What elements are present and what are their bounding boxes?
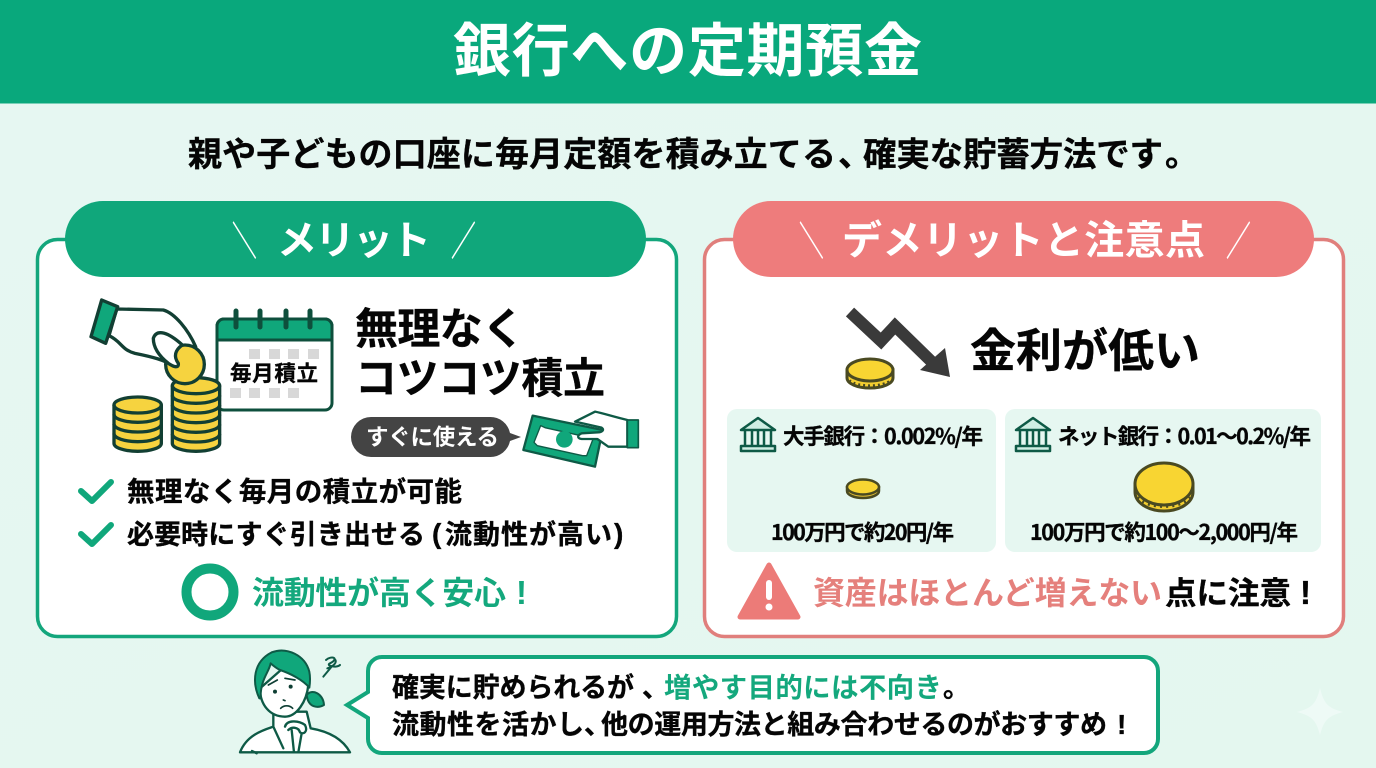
- icon: hand with banknote: [523, 412, 638, 467]
- heading: merits pill: [65, 201, 646, 277]
- icon: falling arrow: [850, 312, 950, 377]
- list: merit 1: 無理なく毎月の積立が可能: [127, 469, 462, 509]
- callout: summary advice: 。: [943, 666, 970, 705]
- icon: calendar: 毎月積立: [230, 357, 318, 388]
- callout: summary advice: 確実に貯められるが: [392, 666, 634, 705]
- subtitle: 、: [838, 127, 872, 176]
- icon: large coin: [1135, 463, 1193, 511]
- subtitle: 親や子どもの口座に毎月定額を積み立てる: [188, 127, 836, 176]
- icon: bank: [741, 418, 775, 451]
- title banner: 銀行への定期預金: [453, 4, 922, 88]
- subtitle: 。: [1165, 127, 1199, 176]
- heading: merits pill: ＼: [232, 208, 257, 267]
- card: major banks: 100万円で約20円/年: [771, 516, 954, 547]
- list: merit 2: [81, 513, 623, 552]
- icon: bank: [1016, 418, 1050, 451]
- card: major banks: [727, 409, 996, 552]
- panel: merits: [38, 201, 676, 636]
- callout: summary advice: 、: [584, 703, 611, 742]
- illustration: worried woman: [240, 651, 350, 753]
- list: merit 2: 必要時にすぐ引き出せる: [127, 513, 425, 552]
- heading: no strain steady saving: 無理なく: [355, 295, 525, 357]
- heading: demerits pill: [733, 201, 1314, 277]
- heading: merits pill: ／: [451, 208, 476, 267]
- subtitle: 確実な貯蓄方法です: [863, 127, 1163, 176]
- panel: demerits: [704, 201, 1344, 636]
- icon: hand dropping coin onto stacks: [91, 300, 220, 451]
- warning: assets barely grow: [740, 565, 1311, 617]
- list: merit 2: 流動性が高い: [445, 513, 612, 552]
- heading: no strain steady saving: コツコツ積立: [355, 345, 605, 406]
- warning: assets barely grow: 点に注意: [1165, 568, 1291, 614]
- heading: demerits pill: デメリットと注意点: [842, 208, 1205, 266]
- card: online banks: [1005, 409, 1321, 552]
- callout: summary advice: 流動性を活かし: [392, 703, 584, 742]
- conclusion: high liquidity: 流動性が高く安心: [252, 568, 506, 614]
- list: merit 2: ): [614, 518, 623, 549]
- title banner: [0, 0, 1376, 104]
- callout: ready to use: [351, 417, 521, 457]
- icon: small coin: [847, 480, 879, 498]
- warning: assets barely grow: 資産はほとんど増えない: [813, 568, 1162, 614]
- heading: no strain steady saving: [355, 295, 605, 406]
- conclusion: high liquidity: !: [516, 574, 527, 611]
- list: merit 2: (: [432, 518, 442, 549]
- card: online banks: ネット銀行：0.01〜0.2%/年: [1058, 420, 1311, 451]
- callout: summary advice: !: [1117, 709, 1126, 740]
- heading: demerits pill: ＼: [799, 208, 824, 267]
- card: online banks: 100万円で約100〜2,000円/年: [1030, 516, 1298, 547]
- heading: low interest: 金利が低い: [970, 315, 1200, 381]
- icon: calendar: [217, 311, 332, 410]
- callout: summary advice: 増やす目的には不向き: [664, 665, 942, 705]
- callout: ready to use: すぐに使える: [366, 420, 499, 452]
- callout: summary advice: [347, 657, 1158, 753]
- callout: summary advice: 他の運用方法と組み合わせるのがおすすめ: [601, 703, 1107, 742]
- decorative sparkle: [1297, 688, 1343, 735]
- subtitle: [188, 127, 1199, 176]
- warning: assets barely grow: !: [1300, 574, 1311, 611]
- callout: summary advice: 、: [642, 666, 669, 705]
- heading: merits pill: メリット: [277, 208, 431, 266]
- card: major banks: 大手銀行：0.002%/年: [783, 420, 983, 451]
- heading: demerits pill: ／: [1226, 208, 1251, 267]
- icon: coin: [847, 359, 893, 388]
